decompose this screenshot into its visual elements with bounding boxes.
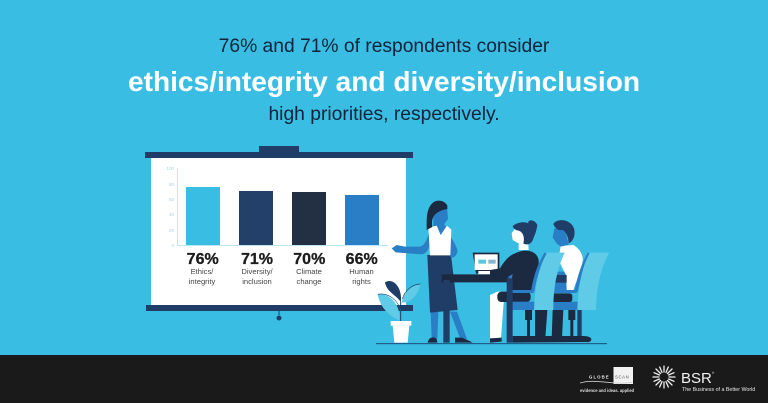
axis labels: 40 <box>169 212 174 217</box>
category labels: Climate <box>296 267 322 276</box>
values <box>187 251 378 268</box>
logo: GlobeScan <box>580 367 635 393</box>
person: standing presenter <box>392 201 473 343</box>
axis labels: 0 <box>171 243 174 248</box>
icon: potted plant <box>378 281 420 343</box>
bar: human rights <box>345 195 379 245</box>
axis labels <box>166 166 174 248</box>
axis labels: 60 <box>169 197 174 202</box>
heading line 2: ethics/integrity and diversity/inclusion <box>128 66 640 97</box>
presenter, plant and table front <box>378 201 515 343</box>
logo: BSR: The Business of a Better World <box>682 387 755 393</box>
category labels: Ethics/ <box>191 267 214 276</box>
axis labels: 100 <box>166 166 174 171</box>
category labels <box>189 267 374 286</box>
category labels: integrity <box>189 277 215 286</box>
chair base <box>513 336 591 343</box>
meeting table <box>442 274 515 343</box>
values: 66% <box>346 251 378 268</box>
logo: GlobeScan: SCAN <box>615 374 629 380</box>
heading line 3: high priorities, respectively. <box>268 104 500 125</box>
axis labels: 80 <box>169 182 174 187</box>
footer bar <box>0 355 768 403</box>
heading line 1: 76% and 71% of respondents consider <box>219 36 549 57</box>
icon: sunburst <box>653 366 675 388</box>
values: 71% <box>241 251 273 268</box>
chair: left <box>507 253 565 343</box>
person: seated man <box>535 220 583 338</box>
heading <box>128 36 640 125</box>
bar: ethics/integrity <box>186 187 220 245</box>
values: 70% <box>293 251 325 268</box>
category labels: rights <box>352 277 371 286</box>
bar chart <box>166 166 388 286</box>
projector screen <box>145 146 413 320</box>
bar: climate change <box>292 192 326 245</box>
logo: BSR: ® <box>712 371 715 375</box>
laptop <box>473 253 499 274</box>
logo: GlobeScan: evidence and ideas. applied <box>580 388 635 393</box>
values: 76% <box>187 251 219 268</box>
logo: GlobeScan: GLOBE <box>589 374 610 380</box>
seated people and chairs <box>490 220 609 343</box>
axes <box>178 168 388 246</box>
axis labels: 20 <box>169 228 174 233</box>
category labels: Human <box>349 267 374 276</box>
person: seated woman <box>490 220 539 343</box>
chair: right <box>552 253 609 338</box>
logo: BSR: BSR <box>681 370 712 387</box>
category labels: change <box>297 277 321 286</box>
logo: BSR <box>653 366 755 393</box>
floor line <box>376 343 607 344</box>
category labels: inclusion <box>242 277 272 286</box>
category labels: Diversity/ <box>241 267 273 276</box>
bar: diversity/inclusion <box>239 191 273 245</box>
